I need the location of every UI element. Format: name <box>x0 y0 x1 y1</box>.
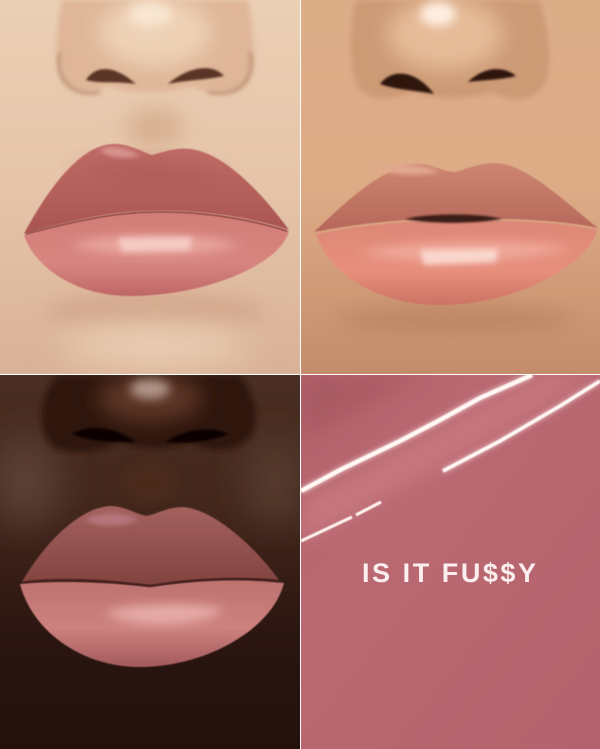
streak: right glare <box>443 381 600 471</box>
panel: gloss swatch <box>301 375 600 749</box>
lips: upper and lower <box>20 506 284 667</box>
lips: upper and lower <box>24 144 289 296</box>
panel: medium skin lips <box>301 0 600 374</box>
icon: nose <box>42 374 256 452</box>
lips: upper and lower <box>314 163 598 305</box>
panel: deep skin lips <box>0 374 305 749</box>
panel: light skin lips <box>0 0 300 374</box>
heading: IS IT FU$$Y <box>362 558 536 588</box>
streak: lower short glare <box>301 502 381 541</box>
icon: nose <box>351 0 549 99</box>
streak: long upper glare <box>301 375 532 491</box>
icon: nose <box>57 0 254 94</box>
